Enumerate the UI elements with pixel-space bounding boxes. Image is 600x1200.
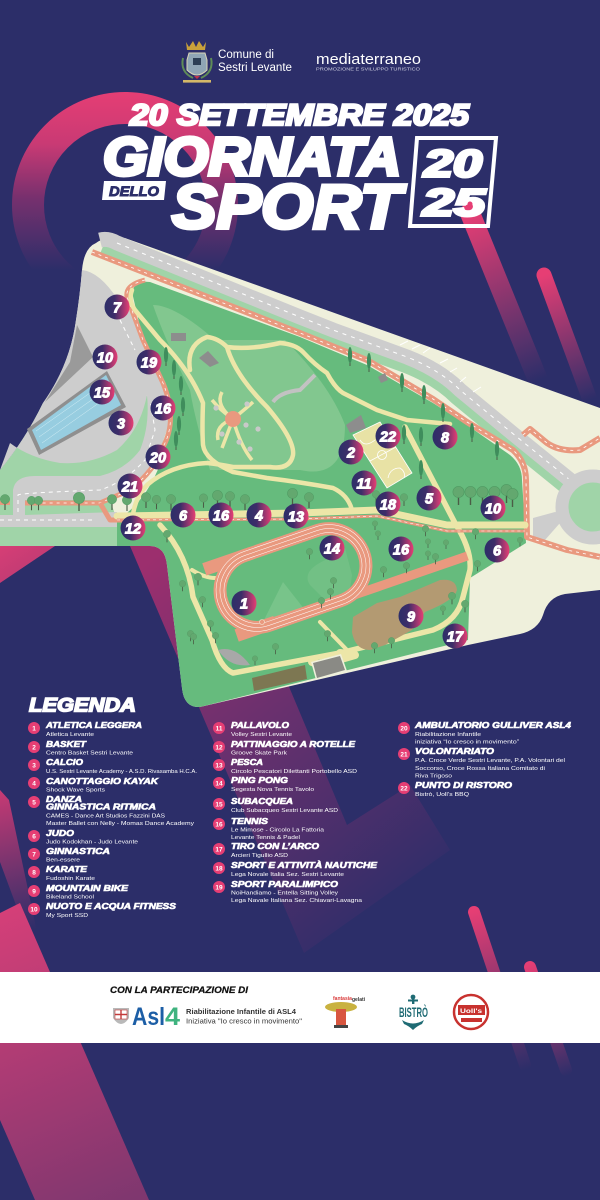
item 7: Ben-essere (46, 858, 80, 864)
pin 10: 10 (97, 350, 113, 366)
grey parking lot and road (0, 270, 170, 527)
item 9: Bikeland School (46, 894, 94, 900)
swimming pool (27, 371, 126, 455)
year box (410, 138, 496, 226)
item 15: Club Subacqueo Sestri Levante ASD (231, 808, 338, 814)
pin 10 (480, 496, 506, 520)
title: DELLO badge (102, 181, 166, 200)
pin 19 (136, 350, 162, 374)
pin 19: 19 (141, 356, 157, 372)
sun sculpture (212, 392, 261, 460)
decorative pink ring (28, 108, 222, 302)
item 11 (213, 720, 292, 738)
item 9 (28, 883, 129, 900)
parking marks (400, 341, 481, 392)
item 22: 22 (400, 786, 408, 792)
item 2: Centro Basket Sestri Levante (46, 750, 133, 756)
pin 6 (484, 538, 510, 562)
year box: 20 (423, 144, 482, 186)
legend title: LEGENDA (29, 696, 136, 716)
decorative pill right (544, 275, 590, 400)
map (0, 238, 600, 707)
item 13: 13 (215, 762, 223, 770)
date heading: 20 SETTEMBRE 2025 (129, 99, 470, 132)
item 5 (28, 794, 194, 827)
logo: tree: fantasia (333, 996, 352, 1002)
logo: tree (325, 996, 366, 1028)
item 14 (213, 775, 314, 793)
item 12: PATTINAGGIO A ROTELLE (231, 739, 355, 749)
pin 3 (108, 410, 134, 436)
item 1: Atletica Levante (46, 732, 94, 738)
lighter lawn (153, 305, 345, 472)
pin 20: 20 (149, 450, 166, 466)
item 21: Riva Trigoso (415, 774, 452, 780)
item 1: ATLETICA LEGGERA (45, 720, 142, 730)
item 13: Circolo Pescatori Dilettanti Portobello ASD (231, 769, 357, 775)
pin 15 (90, 380, 114, 404)
item 16: TENNIS (231, 816, 268, 826)
logo: Comune di Sestri Levante: Sestri Levante (218, 62, 292, 74)
legend column 2 (213, 720, 377, 904)
item 21: VOLONTARIATO (415, 746, 495, 756)
item 5: Master Ballet con Nelly - Momas Dance Academy (46, 821, 194, 827)
item 19 (213, 879, 363, 904)
pin 18 (376, 492, 400, 516)
item 17 (213, 841, 320, 859)
item 13 (213, 757, 357, 775)
pin 5 (416, 486, 442, 510)
item 21: P.A. Croce Verde Sestri Levante, P.A. Volontari del (415, 758, 565, 764)
athletics track (203, 483, 469, 643)
item 16 (213, 816, 325, 841)
item 4: Shock Wave Sports (46, 788, 105, 794)
pin 17 (442, 624, 468, 648)
title: GIORNATA: GIORNATA (103, 127, 401, 187)
item 14: PING PONG (231, 775, 289, 785)
pin 10 (92, 344, 118, 370)
pin 15: 15 (94, 386, 111, 402)
pin 18: 18 (380, 498, 397, 514)
item 18: SPORT E ATTIVITÀ NAUTICHE (231, 860, 377, 870)
pin 21 (118, 474, 142, 498)
item 4: CANOTTAGGIO KAYAK (46, 776, 159, 786)
item 2: 2 (32, 744, 36, 752)
item 1 (28, 720, 142, 738)
item 5: GINNASTICA RITMICA (46, 802, 156, 812)
decorative pill top right (470, 213, 540, 385)
pin 12: 12 (125, 522, 141, 538)
decorative pill bottom far right (530, 967, 566, 1070)
item 5: CAMES - Dance Art Studios Fazzini DAS (46, 814, 165, 820)
item 14: 14 (215, 780, 223, 788)
pin 3: 3 (117, 416, 125, 432)
decorative purple band (130, 546, 450, 953)
pin 6 (170, 502, 196, 528)
item 21: Soccorso, Croce Rossa Italiana Comitato di (415, 766, 545, 772)
pin 14 (320, 536, 344, 560)
logo: tree: gelati (352, 997, 366, 1003)
item 18: Lega Novale Italia Sez. Sestri Levante (231, 872, 344, 878)
grey pond (218, 649, 250, 665)
item 3 (28, 757, 197, 775)
logo: mediaterraneo: mediaterraneo (316, 51, 421, 68)
pin 22: 22 (379, 430, 396, 446)
item 20: AMBULATORIO GULLIVER ASL4 (414, 720, 571, 730)
pin 13: 13 (288, 510, 304, 526)
pin 8 (432, 424, 458, 450)
pin 16: 16 (393, 542, 410, 558)
item 3: 3 (32, 762, 36, 770)
item 10 (28, 901, 176, 919)
pin 16 (388, 536, 414, 562)
item 9: MOUNTAIN BIKE (46, 883, 129, 893)
item 19: Lega Navale Italiana Sez. Chiavari-Lavagna (231, 898, 363, 904)
brown rectangle (252, 665, 307, 691)
item 20 (398, 720, 571, 746)
item 6: 6 (32, 834, 36, 840)
item 10: 10 (30, 906, 38, 914)
salmon line along yellow path (117, 516, 525, 531)
decorative pill bottom right (474, 912, 525, 1065)
trees (0, 347, 523, 665)
item 5: 5 (32, 800, 36, 806)
item 3: U.S. Sestri Levante Academy - A.S.D. Rivasamba H.C.A. (46, 769, 197, 775)
legend column 3 (398, 720, 571, 798)
item 8: 8 (32, 870, 36, 876)
pin 4: 4 (254, 508, 263, 524)
pin 10: 10 (485, 502, 501, 518)
sponsor heading: CON LA PARTECIPAZIONE DI (110, 985, 248, 996)
item 17: Arcieri Tigullio ASD (231, 853, 288, 859)
year box: 25 (422, 182, 486, 224)
item 12: 12 (215, 744, 223, 752)
pin 12 (120, 516, 146, 540)
pin 1: 1 (240, 596, 248, 612)
item 22: PUNTO DI RISTORO (415, 780, 513, 790)
buildings (171, 333, 388, 433)
main road (104, 244, 569, 486)
item 10: NUOTO E ACQUA FITNESS (46, 901, 176, 911)
item 12: Groove Skate Park (231, 750, 287, 756)
decorative pink shape under map left (0, 520, 70, 583)
item 13: PESCA (231, 757, 263, 767)
item 8: KARATE (46, 864, 87, 874)
item 2: BASKET (46, 739, 87, 749)
item 20: 20 (400, 726, 408, 732)
item 22 (398, 780, 513, 798)
park green base (117, 282, 526, 707)
light green lawn left (0, 395, 170, 546)
item 6: Judo Kodokhan - Judo Levante (46, 840, 138, 846)
pin 14: 14 (324, 542, 340, 558)
item 3: CALCIO (46, 757, 84, 767)
pin 11 (352, 470, 376, 496)
item 16: Le Mimose - Circolo La Fattoria (231, 828, 325, 834)
pin 9: 9 (407, 610, 415, 626)
title: SPORT: SPORT (172, 173, 407, 242)
grey path (273, 375, 315, 402)
road dashes left (0, 320, 155, 520)
logo: mediaterraneo: PROMOZIONE E SVILUPPO TURISTICO (316, 66, 421, 72)
salmon cycle path (0, 252, 600, 557)
pin 9 (398, 604, 424, 628)
pin 8: 8 (441, 430, 450, 446)
item 15: 15 (215, 802, 223, 808)
logo: Comune di Sestri Levante (182, 41, 292, 83)
pin 5: 5 (425, 492, 434, 508)
item 18 (213, 860, 377, 878)
item 20: iniziativa “Io cresco in movimento” (415, 740, 519, 746)
roundabout (533, 476, 600, 540)
item 17: 17 (215, 846, 223, 854)
item 9: 9 (32, 888, 36, 896)
item 21: 21 (400, 752, 408, 758)
pin 1 (232, 590, 256, 616)
item 16: 16 (215, 822, 223, 828)
pin 4 (246, 502, 272, 528)
sponsor text: Riabilitazione Infantile di ASL4 (186, 1007, 297, 1016)
pin 2: 2 (346, 446, 355, 462)
mountain bike dirt track (352, 580, 457, 650)
item 5: DANZA (46, 794, 82, 804)
decorative stripe left (0, 790, 37, 932)
map pin badges (90, 294, 510, 648)
logo: ASL4: 4 (165, 1003, 180, 1031)
item 8: Fudoshin Karate (46, 876, 95, 882)
title: DELLO badge: DELLO (109, 183, 159, 199)
yellow paths (117, 290, 525, 673)
pin 6: 6 (493, 544, 502, 560)
pin 7 (104, 294, 130, 320)
pin 7: 7 (113, 300, 122, 316)
pin 21: 21 (121, 480, 138, 496)
pin 20 (146, 444, 170, 470)
item 7: GINNASTICA (46, 846, 110, 856)
item 22: Bistrò, Uoll’s BBQ (415, 792, 470, 798)
item 4: 4 (32, 780, 36, 788)
logo: ASL4: Asl (132, 1003, 165, 1031)
item 15: SUBACQUEA (231, 796, 293, 806)
logo: ASL4 (113, 1003, 180, 1031)
item 2 (28, 739, 133, 756)
item 15 (213, 796, 338, 814)
item 12 (213, 739, 355, 756)
basketball court (353, 422, 412, 488)
item 16: Levante Tennis & Padel (231, 835, 300, 841)
item 20: Riabilitazione Infantile (415, 732, 481, 738)
pin 13 (284, 504, 308, 528)
item 10: My Sport SSD (46, 913, 88, 919)
item 8 (28, 864, 95, 882)
land base (0, 238, 600, 707)
logo: Bistrò (399, 995, 428, 1030)
item 6: JUDO (46, 828, 75, 838)
pin 16: 16 (213, 508, 230, 524)
legend column 1 (28, 720, 197, 919)
pin 2 (338, 440, 364, 464)
pin 6: 6 (179, 508, 188, 524)
item 19: SPORT PARALIMPICO (231, 879, 339, 889)
lawn inside track (308, 548, 352, 600)
logo: stamp: Uoll's (460, 1008, 482, 1015)
pin 16: 16 (155, 402, 172, 418)
pin 11: 11 (356, 476, 372, 492)
item 6 (28, 828, 138, 846)
logo: Comune di Sestri Levante: Comune di (218, 49, 274, 61)
item 21 (398, 746, 565, 780)
sponsor text (186, 1007, 302, 1026)
item 19: NoiHandiamo - Entella Sitting Volley (231, 890, 338, 896)
item 1: 1 (32, 726, 36, 732)
item 19: 19 (215, 884, 223, 892)
item 18: 18 (215, 866, 223, 872)
item 17: TIRO CON L’ARCO (231, 841, 320, 851)
item 7: 7 (32, 852, 36, 858)
item 14: Segesta Nova Tennis Tavolo (231, 787, 314, 793)
item 11: Volley Sestri Levante (231, 732, 292, 738)
logo: stamp (454, 995, 488, 1029)
dark grey ramp (45, 325, 93, 402)
pin 16 (150, 396, 176, 420)
item 4 (28, 776, 159, 794)
pin 17: 17 (447, 630, 464, 646)
pin 22 (376, 424, 400, 448)
building lower (311, 654, 347, 680)
sponsor band (0, 972, 600, 1043)
light green strip (25, 503, 100, 512)
pin 16 (208, 502, 234, 528)
item 11: PALLAVOLO (231, 720, 290, 730)
item 7 (28, 846, 110, 864)
item 11: 11 (216, 726, 223, 732)
sponsor text: Iniziativa "Io cresco in movimento" (186, 1016, 302, 1026)
logo: Bistrò: BISTRÒ (399, 1003, 428, 1020)
decorative pink band bottom left (0, 903, 149, 1200)
